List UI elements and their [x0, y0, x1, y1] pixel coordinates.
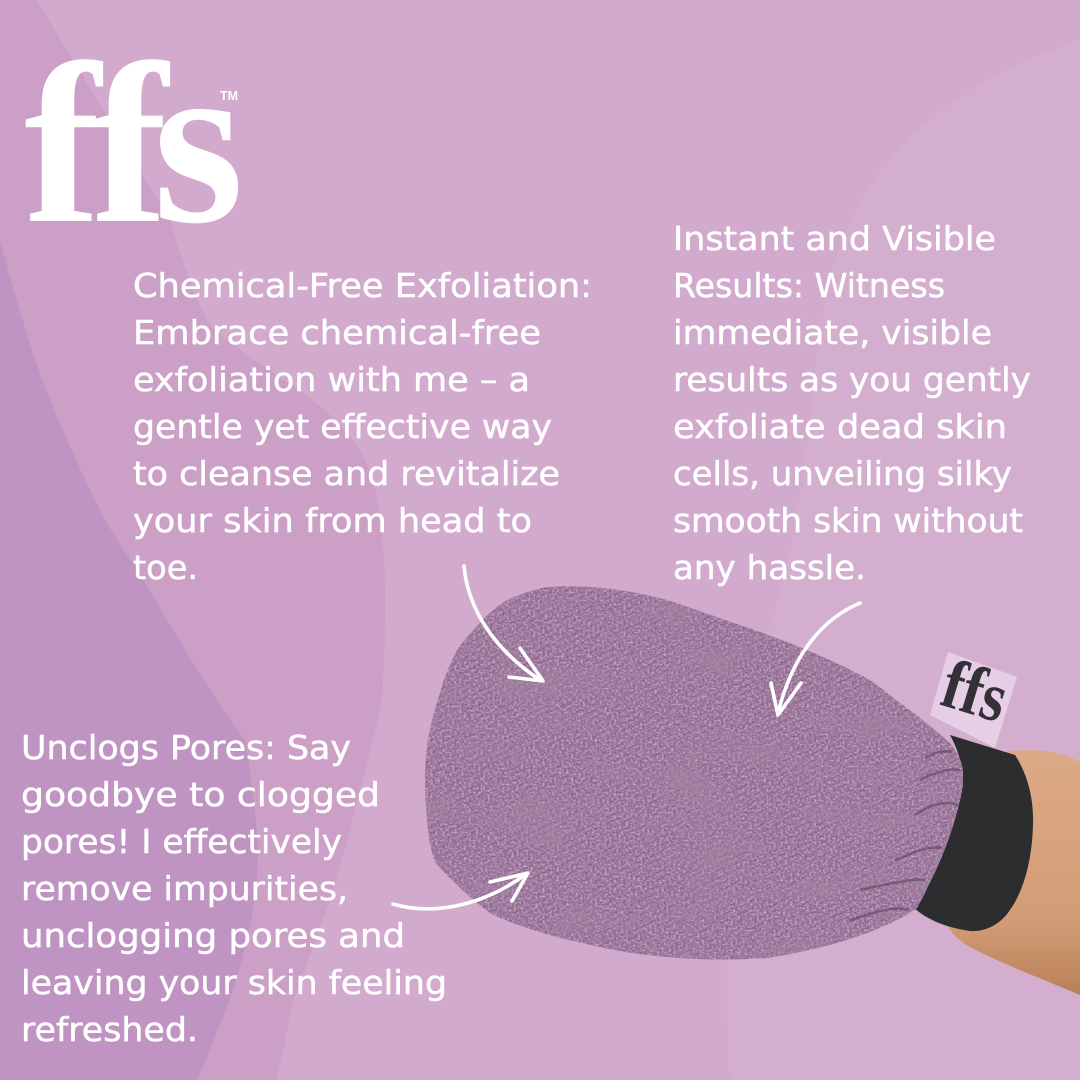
mitt: [425, 586, 963, 960]
arm: [948, 750, 1080, 995]
text block: chemical-free exfoliation: exfoliation with me – a: [133, 360, 530, 399]
text block: unclogs pores: pores! I effectively: [21, 822, 342, 861]
text block: chemical-free exfoliation: Embrace chemical-free: [133, 313, 541, 352]
wrist cuff: [914, 735, 1033, 931]
text block: unclogs pores: refreshed.: [21, 1010, 198, 1049]
text block: instant and visible results: any hassle.: [673, 548, 866, 587]
text block: instant and visible results: Results: Witness: [673, 266, 945, 305]
text block: instant and visible results: immediate, visible: [673, 313, 992, 352]
text block: unclogs pores: unclogging pores and: [21, 916, 405, 955]
text block: chemical-free exfoliation: toe.: [133, 548, 198, 587]
gathered ruffles near the cuff: [850, 751, 960, 920]
logo: ffs: [24, 9, 244, 273]
text block: chemical-free exfoliation: gentle yet effective way: [133, 407, 552, 446]
text block: chemical-free exfoliation: to cleanse and revitalize: [133, 454, 560, 493]
trademark: TM: [220, 89, 238, 103]
tag with logo: ffs: [933, 646, 1017, 738]
logo: ffs: s: [153, 9, 244, 273]
text block: instant and visible results: cells, unveiling silky: [673, 454, 1012, 493]
arrow: to mitt from instant results text: [771, 603, 860, 715]
text block: instant and visible results: [673, 219, 1031, 587]
text block: unclogs pores: Unclogs Pores: Say: [21, 728, 351, 767]
text block: instant and visible results: results as you gently: [673, 360, 1031, 399]
arrow: to mitt from unclogs pores text: [393, 873, 528, 909]
text block: instant and visible results: smooth skin without: [673, 501, 1023, 540]
text block: instant and visible results: exfoliate dead skin: [673, 407, 1007, 446]
text block: chemical-free exfoliation: Chemical-Free Exfoliation:: [133, 266, 592, 305]
arrow: to mitt from chemical-free text: [464, 566, 543, 681]
text block: unclogs pores: remove impurities,: [21, 869, 348, 908]
text block: instant and visible results: Instant and Visible: [673, 219, 996, 258]
text block: unclogs pores: goodbye to clogged: [21, 775, 380, 814]
text block: unclogs pores: [21, 728, 447, 1049]
logo: ffs: f: [24, 17, 103, 271]
text block: chemical-free exfoliation: your skin from head to: [133, 501, 532, 540]
text block: unclogs pores: leaving your skin feeling: [21, 963, 447, 1002]
text block: chemical-free exfoliation: [133, 266, 592, 587]
logo: ffs: f: [91, 17, 170, 271]
